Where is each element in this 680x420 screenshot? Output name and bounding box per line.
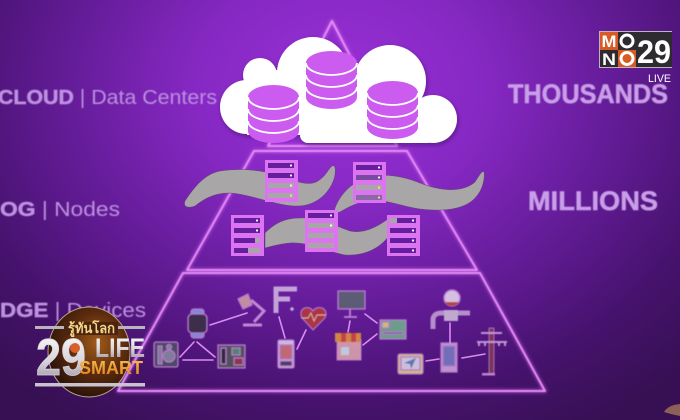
count: millions: MILLIONS <box>528 186 658 216</box>
server 5 <box>387 215 420 256</box>
presenter hand at corner <box>664 404 680 416</box>
cloud with databases <box>220 37 457 143</box>
edge connector lines <box>180 313 485 361</box>
icon: payment card <box>380 320 406 339</box>
logo: Mono29 Live: N <box>602 50 616 69</box>
icon: pressure gauge <box>433 290 470 329</box>
logo: Mono29 Live: 29 <box>637 34 671 70</box>
database left <box>248 85 299 143</box>
icon: water faucet <box>276 289 297 313</box>
icon: speaker safe <box>154 342 178 367</box>
icon: heart rate <box>301 307 326 330</box>
label: cloud tier: CLOUD | Data Centers <box>0 87 217 109</box>
label: edge tier: DGE | Devices <box>0 300 146 322</box>
logo: 29 Life Smart: 29 <box>36 329 86 387</box>
logo: Mono29 Live <box>599 31 672 85</box>
logo: Mono29 Live: M <box>602 32 616 51</box>
fog servers <box>231 160 420 256</box>
edge devices <box>154 289 507 376</box>
logo: 29 Life Smart <box>35 307 145 397</box>
server 1 <box>265 160 298 202</box>
icon: navigation map <box>398 354 423 374</box>
server 2 <box>353 162 386 203</box>
server 4 <box>305 210 338 252</box>
pyramid outline <box>118 21 545 391</box>
database centre <box>306 51 357 109</box>
count: thousands: THOUSANDS <box>508 79 668 109</box>
icon: smartphone <box>278 340 294 368</box>
logo: 29 Life Smart: SMART <box>79 358 143 378</box>
icon: circuit board <box>218 345 245 368</box>
logo: Mono29 Live: LIVE <box>648 73 671 85</box>
logo: 29 Life Smart: LIFE <box>95 333 145 363</box>
icon: handheld device <box>441 343 457 372</box>
server 3 <box>231 215 264 256</box>
label: fog tier: OG | Nodes <box>0 199 120 221</box>
icon: utility pole <box>477 328 507 376</box>
database right <box>367 81 418 139</box>
cloud shape <box>220 37 457 143</box>
fog clouds <box>184 166 484 255</box>
logo: 29 Life Smart: รู้ทันโลก <box>68 319 115 337</box>
icon: smartwatch <box>188 309 207 338</box>
icon: desk lamp <box>238 294 264 325</box>
icon: monitor <box>338 291 365 317</box>
icon: shop <box>335 333 361 360</box>
